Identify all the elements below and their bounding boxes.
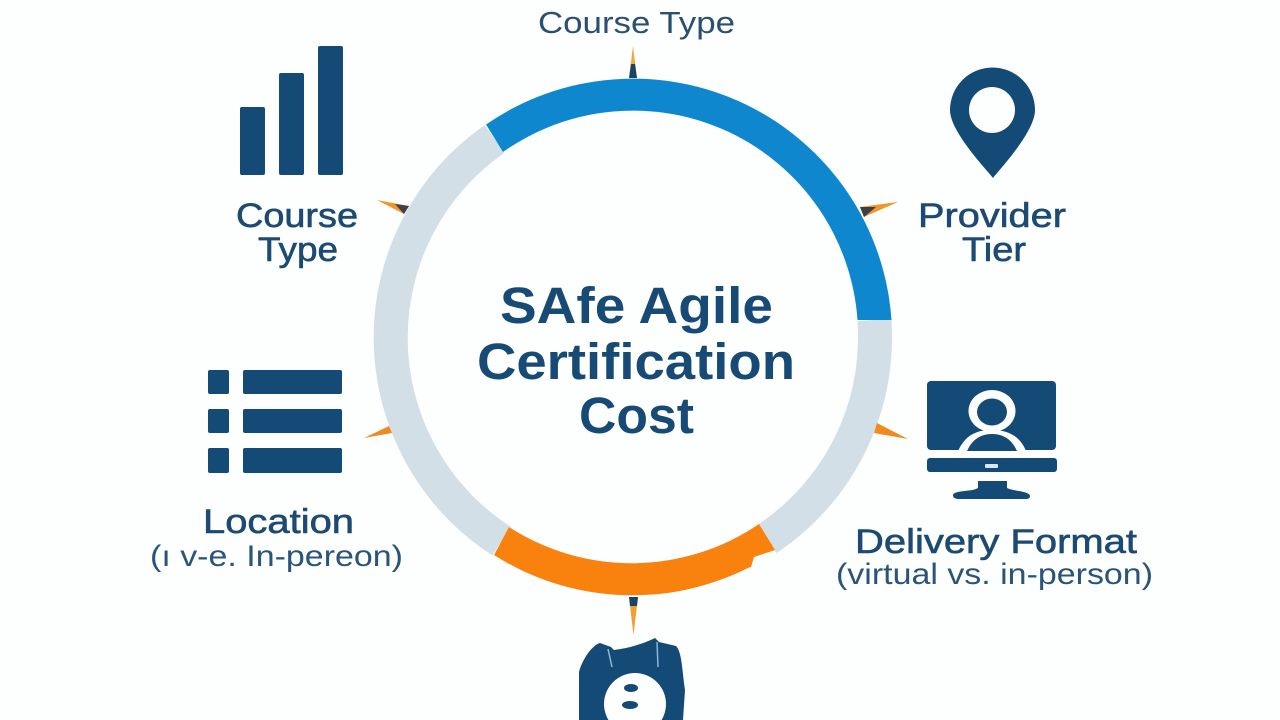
icon: cropped badge at bottom [579,638,685,720]
icon: bar chart [240,46,343,175]
title: Cost [579,387,694,444]
title: SAfe Agile [500,277,773,334]
label: Provider Tier [918,197,1066,269]
title: Certification [477,333,795,390]
label: Provider Tier: Provider [918,197,1066,235]
top label: Course Type: Course Type [538,5,735,40]
spike: upper left [377,200,409,214]
spike: bottom [629,597,638,635]
label: Course Type [236,197,358,269]
factor: provider tier, upper right [918,68,1066,269]
spike: upper right [860,202,898,217]
factor: location, lower left [150,370,403,573]
icon: list [208,370,342,473]
label: Course Type: Type [258,231,338,269]
label: Delivery Format: (virtual vs. in-person) [836,558,1153,591]
factor: course type, upper left [236,46,358,269]
label: Delivery Format [836,523,1153,591]
label: Delivery Format: Delivery Format [855,523,1138,561]
icon: map pin [950,68,1035,178]
central ring diagram [391,79,892,595]
label: Location: Location [203,503,354,541]
spike: lower right [874,423,908,439]
icon: monitor with person [927,381,1057,499]
label: Course Type: Course [236,197,358,235]
orange ring segment [494,524,775,595]
label: Provider Tier: Tier [962,231,1026,269]
ring track, left part [391,139,502,541]
title [477,277,795,444]
label: Location [150,503,403,573]
pointer spikes around ring [364,46,908,635]
ring track, right part [767,320,875,539]
blue ring segment [486,79,892,320]
factor: delivery format, lower right [836,381,1153,591]
label: Location: (ı v-e. In-pereon) [150,540,403,573]
spike: top [629,46,637,78]
spike: lower left [364,426,392,438]
